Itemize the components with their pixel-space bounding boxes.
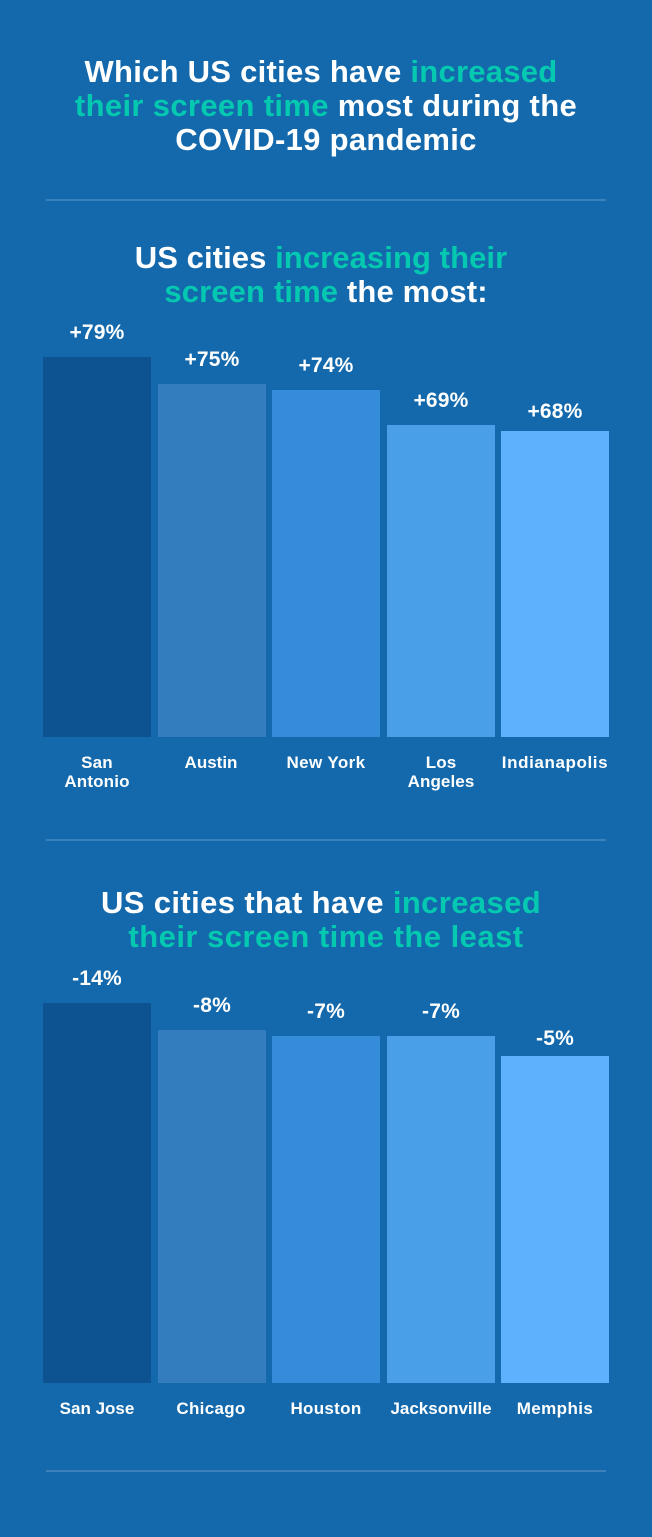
bar: Los Angeles bbox=[387, 425, 495, 737]
label: Austin: Austin bbox=[185, 753, 237, 772]
label: Los Angeles: Los bbox=[426, 753, 456, 772]
label: New York: New York bbox=[286, 753, 366, 772]
value: Houston: -7% bbox=[307, 1000, 345, 1023]
heading: cities increasing least: US cities that have increased bbox=[101, 885, 541, 920]
bar: San Jose bbox=[43, 1003, 151, 1383]
value: Chicago: -8% bbox=[193, 994, 231, 1017]
label: San Antonio bbox=[64, 753, 130, 791]
label: San Jose: San Jose bbox=[60, 1399, 134, 1418]
bar chart: most bbox=[43, 321, 609, 791]
value: Memphis: -5% bbox=[536, 1027, 574, 1050]
heading: cities increasing most bbox=[135, 240, 507, 309]
value: Indianapolis: +68% bbox=[527, 400, 583, 423]
bar: Indianapolis bbox=[501, 431, 609, 737]
label: Memphis: Memphis bbox=[517, 1399, 593, 1418]
value: San Antonio: +79% bbox=[69, 321, 125, 344]
bar: San Antonio bbox=[43, 357, 151, 737]
title: their screen time most during the bbox=[75, 88, 577, 123]
bar chart: least bbox=[43, 967, 609, 1418]
label: Indianapolis: Indianapolis bbox=[502, 753, 608, 772]
title bbox=[75, 54, 577, 157]
value: San Jose: -14% bbox=[72, 967, 122, 990]
value: Jacksonville: -7% bbox=[422, 1000, 460, 1023]
title: Which US cities have increased bbox=[84, 54, 557, 89]
label: Los Angeles: Angeles bbox=[408, 772, 474, 791]
value: Austin: +75% bbox=[184, 348, 240, 371]
label: San Antonio: Antonio bbox=[64, 772, 130, 791]
bar: New York bbox=[272, 390, 380, 737]
bar: Jacksonville bbox=[387, 1036, 495, 1383]
heading: cities increasing least bbox=[101, 885, 541, 954]
label: Houston: Houston bbox=[290, 1399, 362, 1418]
heading: cities increasing most: screen time the most: bbox=[164, 274, 488, 309]
value: Los Angeles: +69% bbox=[413, 389, 469, 412]
label: Los Angeles bbox=[408, 753, 474, 791]
heading: cities increasing most: US cities increasing their bbox=[135, 240, 507, 275]
label: Jacksonville: Jacksonville bbox=[390, 1399, 492, 1418]
label: Chicago: Chicago bbox=[176, 1399, 246, 1418]
title: COVID-19 pandemic bbox=[175, 122, 477, 157]
bar: Houston bbox=[272, 1036, 380, 1383]
heading: cities increasing least: their screen time the least bbox=[128, 919, 524, 954]
label: San Antonio: San bbox=[81, 753, 113, 772]
bar: Austin bbox=[158, 384, 266, 737]
value: New York: +74% bbox=[298, 354, 354, 377]
bar: Memphis bbox=[501, 1056, 609, 1383]
bar: Chicago bbox=[158, 1030, 266, 1383]
